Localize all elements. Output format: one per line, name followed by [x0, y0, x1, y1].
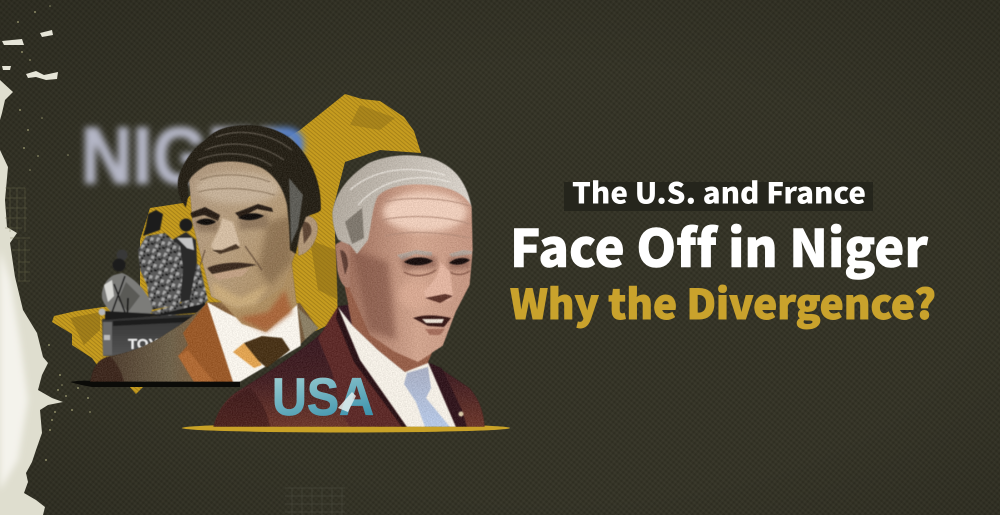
face [350, 172, 473, 362]
under-eye bags [404, 270, 470, 276]
shirt [207, 302, 301, 382]
title line 1: The U.S. and France [572, 170, 866, 212]
neck [212, 262, 297, 332]
forehead light [383, 192, 467, 232]
forehead wrinkles [198, 175, 275, 195]
eye sockets [400, 256, 437, 270]
face [188, 160, 298, 308]
USA label: USA [272, 368, 374, 427]
brows [397, 250, 432, 260]
portrait: USA president [213, 155, 485, 427]
nose [211, 218, 240, 253]
suit [213, 304, 485, 427]
title line 2: Face Off in Niger [510, 207, 929, 282]
portrait: France president [90, 125, 321, 382]
soldiers on truck [98, 210, 210, 357]
hair [177, 125, 321, 254]
suit [90, 302, 318, 382]
tie [404, 367, 450, 427]
eyes [404, 257, 433, 265]
cheek shade [352, 250, 396, 340]
tie [244, 336, 290, 368]
mouth [413, 315, 451, 327]
brows [190, 207, 220, 221]
ear [297, 215, 318, 256]
right lapel [428, 362, 467, 427]
truck: TOY [128, 336, 159, 353]
shirt [338, 307, 456, 427]
title line 3: Why the Divergence? [510, 271, 936, 331]
decorative grid: bottom [285, 488, 345, 515]
flag pin [458, 412, 464, 416]
decorative grid [5, 188, 30, 281]
eye sockets [193, 220, 220, 232]
nose [424, 262, 453, 301]
cheek light [399, 281, 431, 309]
cheek shade [258, 215, 294, 286]
nasolabial lines [200, 246, 262, 270]
eyes [196, 219, 216, 225]
blurred NIGER label: NIGER [81, 111, 307, 200]
neck [343, 280, 440, 372]
shoulder shade [213, 388, 270, 427]
mouth [207, 263, 257, 274]
soldier: rear left [98, 250, 152, 325]
gold base ellipse [182, 424, 510, 432]
forehead wrinkles [382, 199, 470, 238]
ear [335, 241, 353, 288]
torn highlight [338, 392, 356, 412]
truck [102, 303, 210, 357]
map of Niger [52, 94, 421, 394]
lower-face light [212, 282, 268, 308]
hair [332, 155, 472, 254]
ground shadow [70, 381, 240, 387]
torn white paper edge [0, 30, 63, 515]
left lapel [318, 306, 407, 427]
soldier: tall camouflage [138, 210, 183, 310]
soldier: right lower [150, 218, 208, 318]
forehead light [196, 172, 280, 204]
paint specks [17, 5, 91, 461]
